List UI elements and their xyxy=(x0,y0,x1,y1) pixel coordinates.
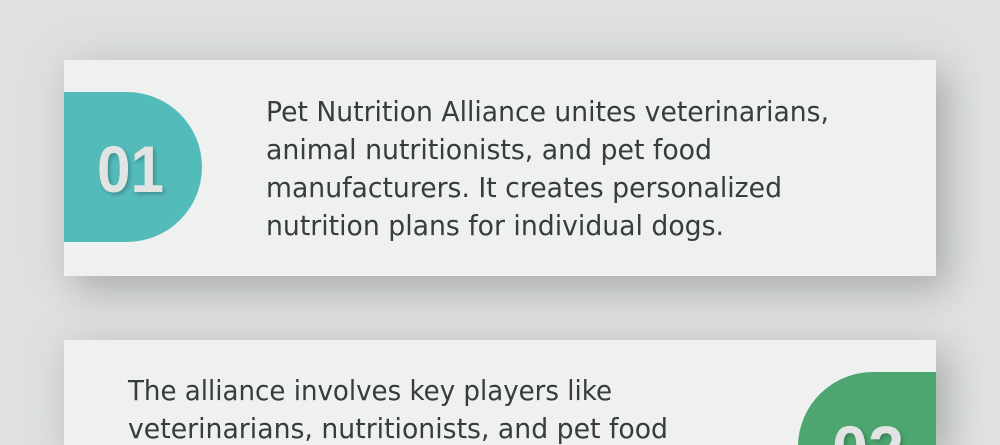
icon: number badge 01 xyxy=(64,92,202,242)
text block: card 01 description: manufacturers. It creates personalized xyxy=(266,171,782,204)
text block: card 01 description xyxy=(266,95,829,242)
text block: card 01 description: nutrition plans for individual dogs. xyxy=(266,209,724,242)
icon: number badge 01: 01 xyxy=(97,132,164,206)
text block: card 02 description xyxy=(127,374,668,445)
text block: card 02 description: veterinarians, nutritionists, and pet food xyxy=(128,412,668,445)
text block: card 02 description: The alliance involves key players like xyxy=(127,374,612,407)
panel: card 01 background xyxy=(64,60,936,276)
text block: card 01 description: animal nutritionists, and pet food xyxy=(266,133,712,166)
icon: number badge 02 xyxy=(798,372,936,445)
infographic content xyxy=(64,92,936,445)
panel: card 02 background xyxy=(64,340,936,445)
text block: card 01 description: Pet Nutrition Alliance unites veterinarians, xyxy=(266,95,829,128)
